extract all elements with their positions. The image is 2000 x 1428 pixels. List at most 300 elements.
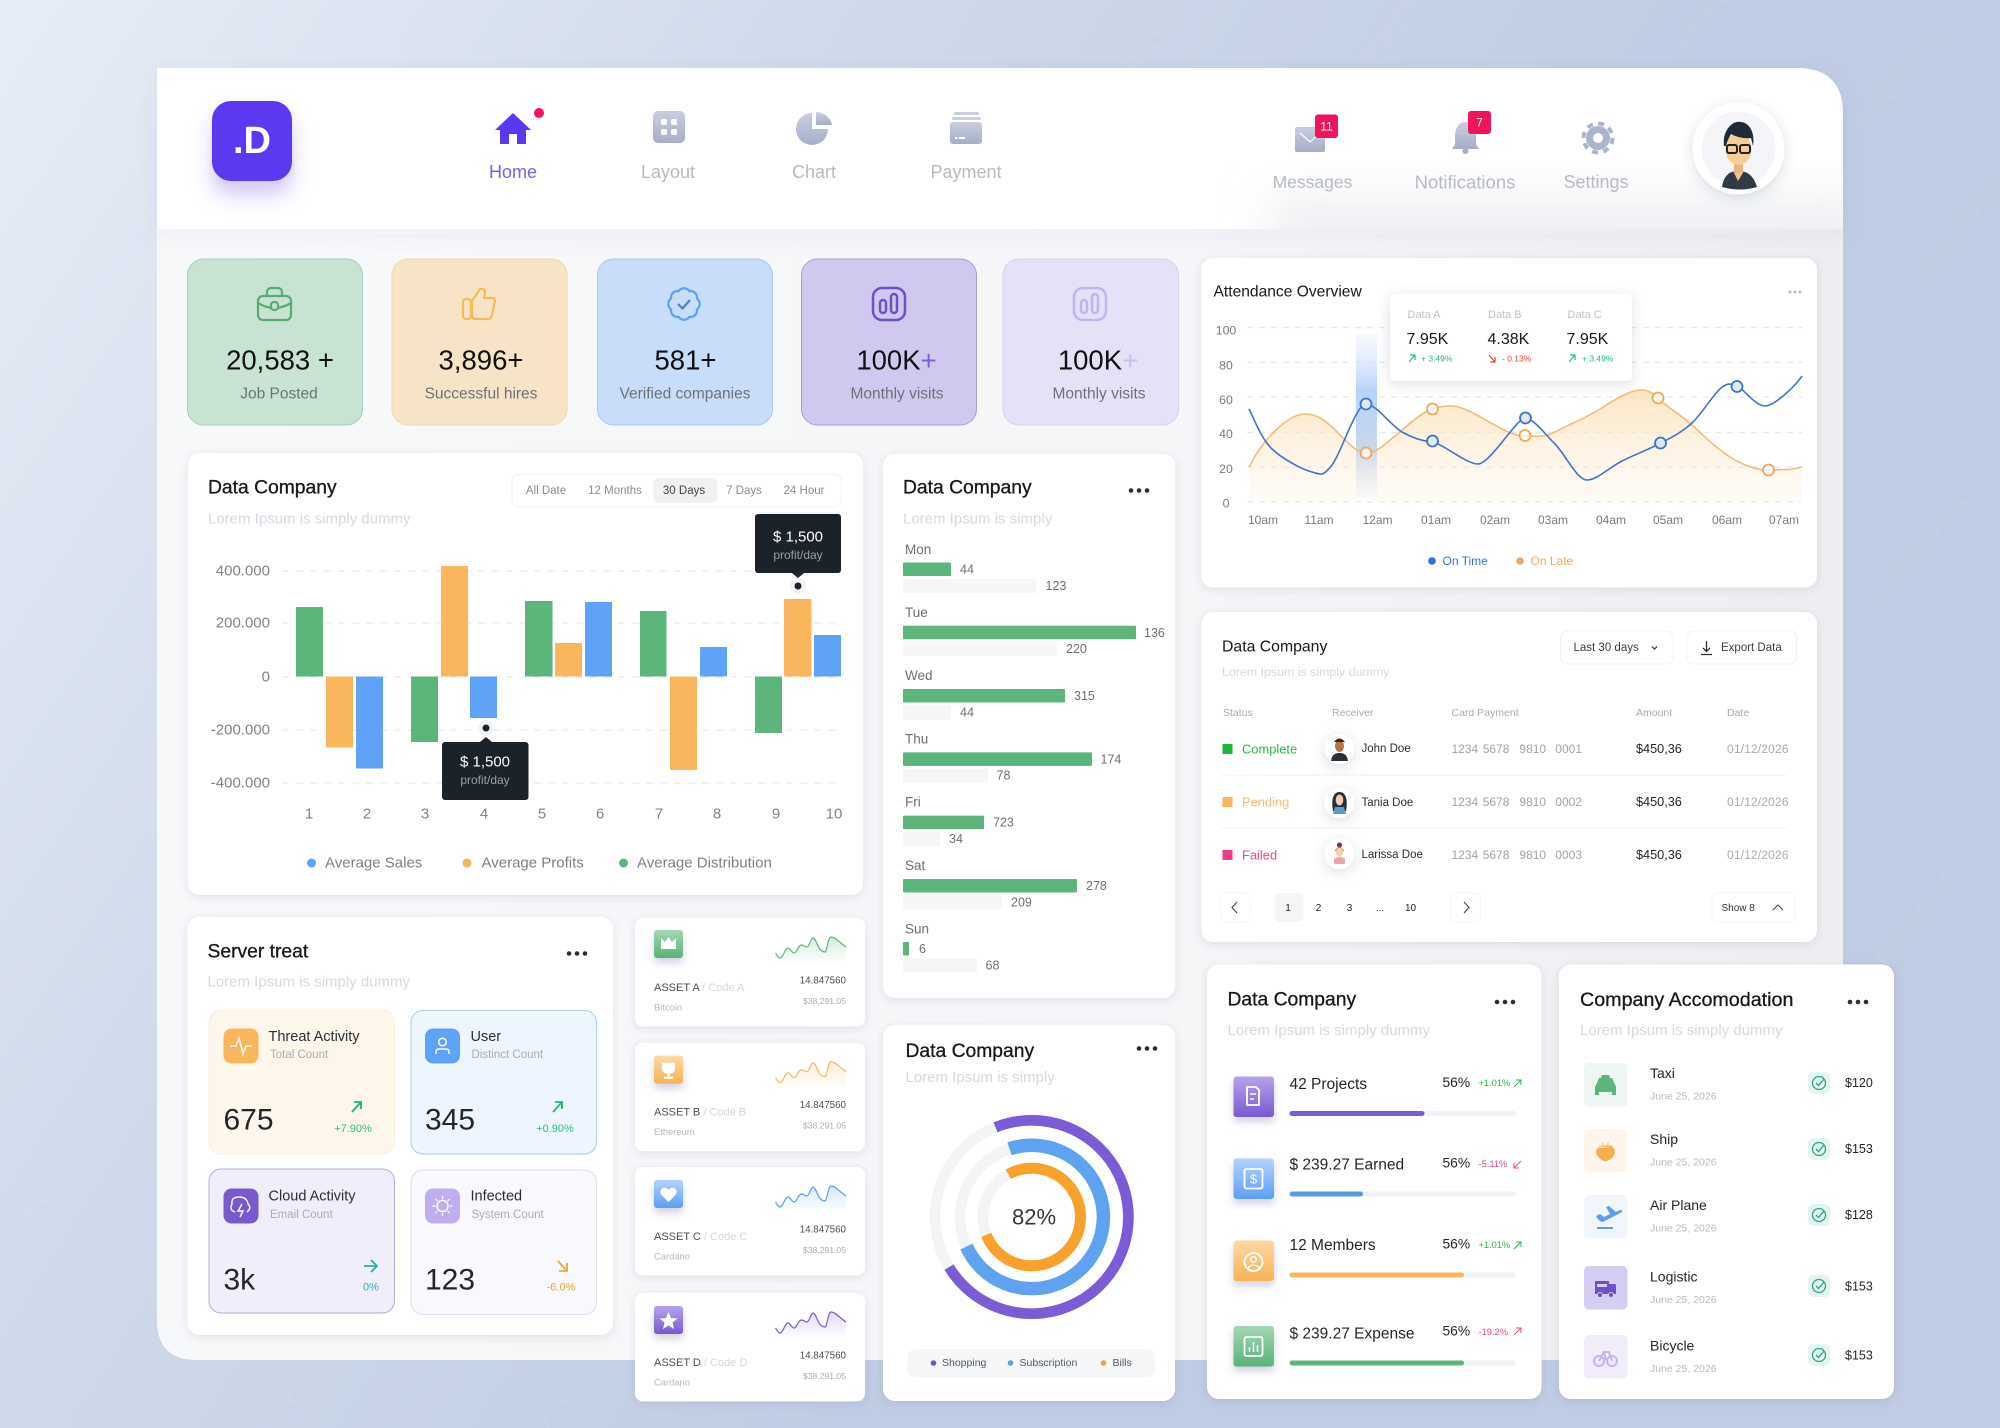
tile: user: [411, 1010, 596, 1154]
icon: thumbs up: [463, 289, 495, 319]
row: air plane: [1584, 1195, 1873, 1238]
y axis labels: 400.000: [216, 562, 270, 580]
row: expense: $ 239.27 Expense: [1290, 1326, 1414, 1342]
row: Sat: [903, 858, 1107, 909]
subtitle: Lorem Ipsum is simply: [903, 510, 1053, 528]
icon: analytics: [873, 288, 905, 320]
subtitle: Lorem Ipsum is simply dummy: [208, 510, 411, 528]
button: export data: [1687, 631, 1796, 664]
tooltip top: [755, 514, 841, 594]
x axis: 01am: [1421, 513, 1451, 527]
row: Sun: 68: [986, 958, 999, 972]
x axis: 02am: [1480, 513, 1510, 527]
y axis: 80: [1219, 358, 1233, 372]
icon: heart: [654, 1180, 683, 1208]
table row: John Doe: Complete: [1242, 742, 1297, 756]
text: FREEPIK: [18, 314, 126, 440]
donut rings: [935, 1120, 1128, 1314]
row: members: 12 Members: [1290, 1237, 1376, 1254]
row: earned: -5.11%: [1478, 1159, 1507, 1169]
row: air plane: June 25, 2026: [1650, 1222, 1717, 1234]
table row: Larissa Doe: 5678: [1483, 848, 1510, 862]
table header: Amount: [1636, 707, 1672, 719]
asset card A: ASSET A / Code A: [654, 982, 745, 994]
heading: Data Company: [1228, 990, 1356, 1010]
date range tabs: [512, 474, 841, 507]
table row: John Doe: 0001: [1555, 742, 1582, 756]
table row: Tania Doe: Tania Doe: [1362, 797, 1413, 809]
row: Tue: 136: [1144, 626, 1165, 640]
table row: Larissa Doe: 0003: [1555, 848, 1582, 862]
x axis labels: 10: [826, 806, 842, 822]
chart legend: [307, 854, 772, 872]
row: bicycle: June 25, 2026: [1650, 1363, 1717, 1375]
row: bicycle: Bicycle: [1650, 1338, 1695, 1354]
row: expense: [1234, 1324, 1521, 1366]
header: Notifications: [1415, 111, 1515, 192]
text: FREEPIK: [1848, 14, 1956, 140]
nav: Layout: Layout: [641, 162, 695, 182]
asset card B: $38,291.05: [803, 1121, 846, 1131]
row: Fri: [903, 794, 1014, 846]
row: Wed: Wed: [905, 668, 933, 683]
data tooltip: Data B: [1488, 309, 1522, 321]
heading: Company Accomodation: [1580, 989, 1793, 1011]
row: Sat: Sat: [905, 858, 926, 873]
table row: John Doe: 01/12/2026: [1727, 742, 1789, 756]
sparkline: [776, 1312, 846, 1339]
menu dots: [1788, 290, 1802, 294]
x axis: [1248, 513, 1799, 527]
data tooltip: + 3.49%: [1582, 354, 1614, 364]
tile: user: 345: [425, 1104, 475, 1136]
row: Thu: 78: [996, 769, 1010, 783]
row: Tue: [903, 605, 1165, 656]
stat card: Monthly visits light: Monthly visits: [1052, 386, 1146, 402]
donut legend: Shopping: [942, 1357, 987, 1369]
date range tabs: 24 Hour: [784, 485, 825, 497]
stat card: Verified companies: Verified companies: [620, 386, 751, 402]
stat card: Successful hires: 3,896+: [439, 344, 523, 376]
table row: Tania Doe: 5678: [1483, 795, 1510, 809]
table row: Larissa Doe: 01/12/2026: [1727, 848, 1789, 862]
heading: Attendance Overview: [1214, 284, 1362, 300]
table row: Larissa Doe: Larissa Doe: [1362, 849, 1423, 861]
icon: crown: [654, 930, 683, 958]
nav: Home: Home: [489, 162, 537, 182]
tile: threat activity: 675: [224, 1104, 274, 1136]
header bar: [157, 68, 1843, 229]
row: logistic: [1584, 1266, 1873, 1310]
asset card B: 14.847560: [800, 1100, 847, 1111]
tile: cloud activity: 3k: [224, 1264, 256, 1296]
nav: Chart: [792, 112, 836, 182]
table row: Tania Doe: 9810: [1519, 795, 1546, 809]
text: FREEPIK: [28, 804, 136, 930]
tile: cloud activity: 0%: [363, 1282, 379, 1294]
menu dots: [1129, 488, 1149, 493]
stat card: Successful hires: Successful hires: [425, 386, 538, 402]
pagination: [1220, 893, 1795, 922]
chart legend: Average Distribution: [637, 854, 772, 872]
table header: Card Payment: [1452, 707, 1519, 719]
asset card C: $38,291.05: [803, 1245, 846, 1255]
x axis: 10am: [1248, 513, 1278, 527]
tile: threat activity: Total Count: [270, 1049, 329, 1061]
table row: Tania Doe: [1222, 788, 1789, 818]
donut center value: 82%: [1012, 1204, 1056, 1230]
row: ship: June 25, 2026: [1650, 1156, 1717, 1168]
stat card: Monthly visits: 100K+: [856, 344, 937, 376]
tile: infected: [411, 1170, 596, 1314]
tile: user: +0.90%: [536, 1123, 574, 1135]
row: logistic: $153: [1845, 1280, 1873, 1294]
stat card: Job Posted: 20,583 +: [226, 344, 334, 376]
y axis labels: -400.000: [211, 774, 270, 792]
date range tabs: 7 Days: [726, 485, 762, 497]
stat card: Verified companies: [598, 259, 772, 425]
x axis: 06am: [1712, 513, 1742, 527]
tooltip bottom: profit/day: [460, 773, 510, 787]
row: Wed: 44: [960, 706, 974, 720]
dropdown: last 30 days: Last 30 days: [1574, 642, 1639, 654]
asset card B: [635, 1043, 865, 1151]
row: taxi: $120: [1845, 1076, 1873, 1090]
row: earned: 56%: [1442, 1156, 1470, 1170]
logo: [212, 101, 292, 181]
pagination: 1: [1285, 903, 1291, 914]
icon: trophy: [654, 1056, 683, 1084]
header: Notifications: 7: [1476, 116, 1483, 130]
row: taxi: June 25, 2026: [1650, 1090, 1717, 1102]
tile: cloud activity: Email Count: [270, 1209, 333, 1221]
row: Sun: 6: [919, 942, 926, 956]
tooltip bottom: $ 1,500: [460, 754, 510, 770]
stat card: Job Posted: [188, 259, 362, 425]
row: Mon: 123: [1046, 579, 1066, 593]
logo: .D: [233, 120, 271, 162]
y axis labels: [211, 562, 270, 792]
x axis labels: 1: [305, 806, 313, 822]
y axis labels: 0: [262, 668, 270, 686]
stat card: Monthly visits: Monthly visits: [850, 386, 944, 402]
row: air plane: $128: [1845, 1208, 1873, 1222]
legend: On Time: [1442, 554, 1488, 568]
y axis: 0: [1223, 496, 1230, 510]
row: Wed: [903, 668, 1095, 720]
x axis labels: 3: [421, 806, 429, 822]
tile: threat activity: [209, 1010, 394, 1154]
user avatar: [1692, 102, 1784, 194]
row: Tue: Tue: [905, 605, 928, 620]
asset card A: $38,291.05: [803, 996, 846, 1006]
text: FREEPIK: [28, 64, 136, 190]
data tooltip: + 3.49%: [1421, 354, 1453, 364]
row: earned: [1234, 1156, 1521, 1199]
donut legend: Bills: [1112, 1357, 1132, 1369]
icon: verified badge: [668, 288, 700, 320]
row: bicycle: [1584, 1335, 1873, 1378]
tile: threat activity: +7.90%: [334, 1123, 372, 1135]
row: Sat: 278: [1086, 879, 1107, 893]
date range tabs: All Date: [526, 485, 566, 497]
row: Tue: 220: [1066, 642, 1087, 656]
menu dots: [1495, 1000, 1515, 1004]
x axis: 12am: [1362, 513, 1393, 527]
x axis labels: 9: [772, 806, 780, 822]
row: taxi: [1584, 1063, 1873, 1106]
data tooltip: Data C: [1568, 309, 1602, 321]
row: ship: [1584, 1129, 1873, 1172]
y axis: [1216, 324, 1236, 510]
asset card D: Cardano: [654, 1376, 690, 1388]
panel: server treat: [188, 917, 613, 1335]
tile: cloud activity: Cloud Activity: [268, 1188, 356, 1204]
y axis labels: 200.000: [216, 614, 270, 632]
button: export data: Export Data: [1721, 642, 1782, 654]
row: expense: -19.2%: [1478, 1327, 1508, 1337]
asset card C: Cardano: [654, 1250, 690, 1262]
data tooltip: Data A: [1408, 309, 1441, 321]
tile: infected: -6.0%: [547, 1282, 576, 1294]
row: projects: 42 Projects: [1290, 1076, 1367, 1093]
table row: Tania Doe: 1234: [1452, 795, 1479, 809]
row: Fri: 34: [949, 832, 963, 846]
x axis labels: 4: [480, 806, 488, 822]
table row: Larissa Doe: 1234: [1452, 848, 1479, 862]
pagination: 2: [1316, 903, 1322, 914]
panel: bar chart card: [188, 453, 863, 895]
asset card C: 14.847560: [800, 1224, 847, 1236]
row: Sun: [903, 922, 999, 972]
heading: Data Company: [903, 478, 1032, 498]
row: logistic: June 25, 2026: [1650, 1294, 1717, 1306]
row: earned: $: [1250, 1172, 1258, 1186]
pagination: Show 8: [1722, 903, 1755, 914]
row: earned: $ 239.27 Earned: [1290, 1156, 1404, 1174]
asset card B: Ethereum: [654, 1126, 695, 1137]
row: Thu: Thu: [905, 732, 928, 746]
text: FREEPIK: [18, 1104, 126, 1230]
data tooltip: 7.95K: [1406, 331, 1449, 348]
tile: infected: 123: [425, 1264, 475, 1296]
table row: John Doe: $450,36: [1636, 742, 1682, 756]
subtitle: Lorem Ipsum is simply dummy: [208, 974, 411, 990]
row: Sun: Sun: [905, 922, 929, 936]
sparkline: [776, 1186, 846, 1213]
row: expense: 56%: [1442, 1324, 1470, 1338]
header: Notifications: Notifications: [1415, 172, 1515, 192]
menu dots: [567, 951, 587, 956]
table row: John Doe: 5678: [1483, 742, 1510, 756]
asset card D: [635, 1293, 865, 1402]
text: FREEPIK: [1858, 864, 1966, 990]
row: Fri: 723: [993, 816, 1014, 830]
row: projects: 56%: [1442, 1075, 1470, 1090]
panel: transactions table: [1202, 612, 1817, 942]
row: Mon: 44: [960, 562, 974, 576]
asset card D: ASSET D / Code D: [654, 1357, 747, 1369]
date range tabs: 12 Months: [588, 485, 642, 497]
subtitle: Lorem Ipsum is simply dummy: [1580, 1022, 1783, 1039]
pagination: ...: [1376, 903, 1384, 914]
sparkline: [776, 937, 846, 964]
row: bicycle: $153: [1845, 1348, 1873, 1362]
row: Thu: 174: [1100, 752, 1121, 766]
subtitle: Lorem Ipsum is simply dummy: [1222, 665, 1390, 679]
row: Mon: Mon: [905, 542, 931, 557]
heading: Data Company: [1222, 638, 1327, 656]
x axis labels: 6: [596, 806, 604, 822]
panel: company accomodation: [1559, 964, 1894, 1399]
y axis: 20: [1219, 462, 1233, 476]
pagination: 3: [1347, 903, 1353, 914]
x axis: 05am: [1653, 513, 1683, 527]
table row: Larissa Doe: 9810: [1519, 848, 1546, 862]
data tooltip: 7.95K: [1566, 331, 1609, 348]
panel: horizontal bars card: [883, 454, 1175, 998]
table row: John Doe: 9810: [1519, 742, 1546, 756]
asset card A: [635, 918, 865, 1026]
donut legend: Subscription: [1020, 1357, 1077, 1369]
table row: John Doe: 1234: [1452, 742, 1479, 756]
chart legend: Average Sales: [325, 854, 422, 872]
row: ship: Ship: [1650, 1131, 1678, 1147]
line chart: [1249, 333, 1802, 502]
y axis labels: -200.000: [211, 722, 270, 738]
panel: donut chart: [883, 1025, 1175, 1401]
nav: Chart: Chart: [792, 162, 836, 182]
nav: Home: [489, 108, 544, 182]
data tooltip: [1390, 294, 1632, 381]
tile: cloud activity: [209, 1169, 394, 1313]
table row: John Doe: [1222, 734, 1789, 764]
bars: [296, 566, 841, 770]
row: Mon: [903, 542, 1066, 593]
row: Fri: Fri: [905, 794, 921, 810]
asset card C: ASSET C / Code C: [654, 1231, 747, 1243]
table header: Receiver: [1332, 707, 1374, 719]
asset card A: Bitcoin: [654, 1002, 682, 1012]
tile: threat activity: Threat Activity: [268, 1029, 360, 1045]
panel: progress card: [1207, 964, 1542, 1399]
table row: Larissa Doe: $450,36: [1636, 848, 1682, 862]
pagination: 10: [1405, 903, 1416, 914]
stat card: Monthly visits: [802, 259, 976, 425]
asset card B: ASSET B / Code B: [654, 1107, 746, 1119]
row: Thu: [903, 732, 1121, 783]
date range tabs: 30 Days: [663, 485, 705, 497]
x axis labels: [305, 806, 842, 822]
table row: Larissa Doe: Failed: [1242, 848, 1277, 862]
table header: Status: [1223, 707, 1253, 719]
legend: On Late: [1530, 554, 1574, 568]
table row: Tania Doe: $450,36: [1636, 795, 1682, 809]
table row: Larissa Doe: [1222, 839, 1789, 869]
tile: infected: System Count: [472, 1209, 545, 1221]
sparkline: [776, 1062, 846, 1089]
table row: John Doe: John Doe: [1362, 743, 1411, 755]
icon: analytics light: [1074, 288, 1106, 320]
dropdown: last 30 days: [1560, 631, 1673, 664]
row: members: [1234, 1236, 1521, 1281]
y axis: 60: [1219, 393, 1233, 407]
header: Messages: [1273, 114, 1353, 192]
table row: Tania Doe: 0002: [1555, 795, 1582, 809]
table header: [1223, 707, 1749, 719]
table header: Date: [1727, 707, 1749, 719]
stat card: Monthly visits light: [1003, 259, 1178, 425]
text: FREEPIK: [1868, 484, 1976, 610]
subtitle: Lorem Ipsum is simply dummy: [1228, 1022, 1431, 1039]
row: air plane: Air Plane: [1650, 1197, 1707, 1213]
header: Settings: [1563, 124, 1629, 192]
nav: Payment: [930, 112, 1002, 182]
menu dots: [1848, 1000, 1868, 1004]
x axis labels: 7: [655, 806, 663, 822]
tooltip bottom: [442, 720, 528, 800]
tile: infected: Infected: [470, 1188, 522, 1204]
icon: briefcase: [258, 288, 291, 320]
x axis: 04am: [1596, 513, 1626, 527]
row: projects: +1.01%: [1478, 1078, 1510, 1088]
x axis labels: 2: [363, 806, 371, 822]
subtitle: Lorem Ipsum is simply: [906, 1069, 1055, 1086]
header: Settings: Settings: [1563, 172, 1629, 192]
icon: star: [654, 1306, 683, 1334]
row: ship: $153: [1845, 1142, 1873, 1156]
legend: [1428, 554, 1574, 568]
header: Messages: Messages: [1273, 172, 1353, 192]
nav: Payment: Payment: [930, 162, 1002, 182]
row: members: 56%: [1442, 1236, 1470, 1252]
data tooltip: 4.38K: [1488, 331, 1530, 348]
stat card: Job Posted: Job Posted: [240, 386, 318, 402]
stat card: Successful hires: [392, 259, 567, 425]
tile: user: User: [470, 1029, 501, 1045]
tooltip top: $ 1,500: [773, 528, 823, 546]
asset card D: 14.847560: [800, 1350, 847, 1362]
row: Sat: 209: [1011, 895, 1032, 909]
chart legend: Average Profits: [482, 854, 584, 872]
table row: Tania Doe: 01/12/2026: [1727, 795, 1789, 809]
panel: attendance overview: [1202, 258, 1817, 588]
x axis labels: 5: [538, 806, 546, 822]
row: projects: [1234, 1075, 1521, 1117]
x axis: 03am: [1538, 513, 1568, 527]
row: logistic: Logistic: [1650, 1268, 1697, 1284]
x axis: 07am: [1769, 513, 1799, 527]
asset card D: $38,291.05: [803, 1371, 846, 1381]
row: members: +1.01%: [1478, 1240, 1510, 1250]
data tooltip: - 0.13%: [1502, 354, 1532, 364]
y axis: 40: [1219, 427, 1233, 441]
header: Messages: 11: [1320, 120, 1333, 134]
heading: Server treat: [208, 942, 309, 962]
heading: Data Company: [906, 1041, 1034, 1062]
y axis: 100: [1216, 324, 1236, 338]
table row: Tania Doe: Pending: [1242, 794, 1289, 810]
tile: user: Distinct Count: [472, 1049, 544, 1061]
asset card A: 14.847560: [800, 976, 847, 986]
menu dots: [1137, 1046, 1157, 1051]
heading: Data Company: [208, 478, 337, 498]
nav: Layout: [641, 111, 695, 182]
stat card: Monthly visits light: 100K+: [1058, 344, 1138, 376]
asset card C: [635, 1167, 865, 1276]
x axis labels: 8: [713, 806, 721, 822]
tooltip top: profit/day: [773, 548, 823, 562]
